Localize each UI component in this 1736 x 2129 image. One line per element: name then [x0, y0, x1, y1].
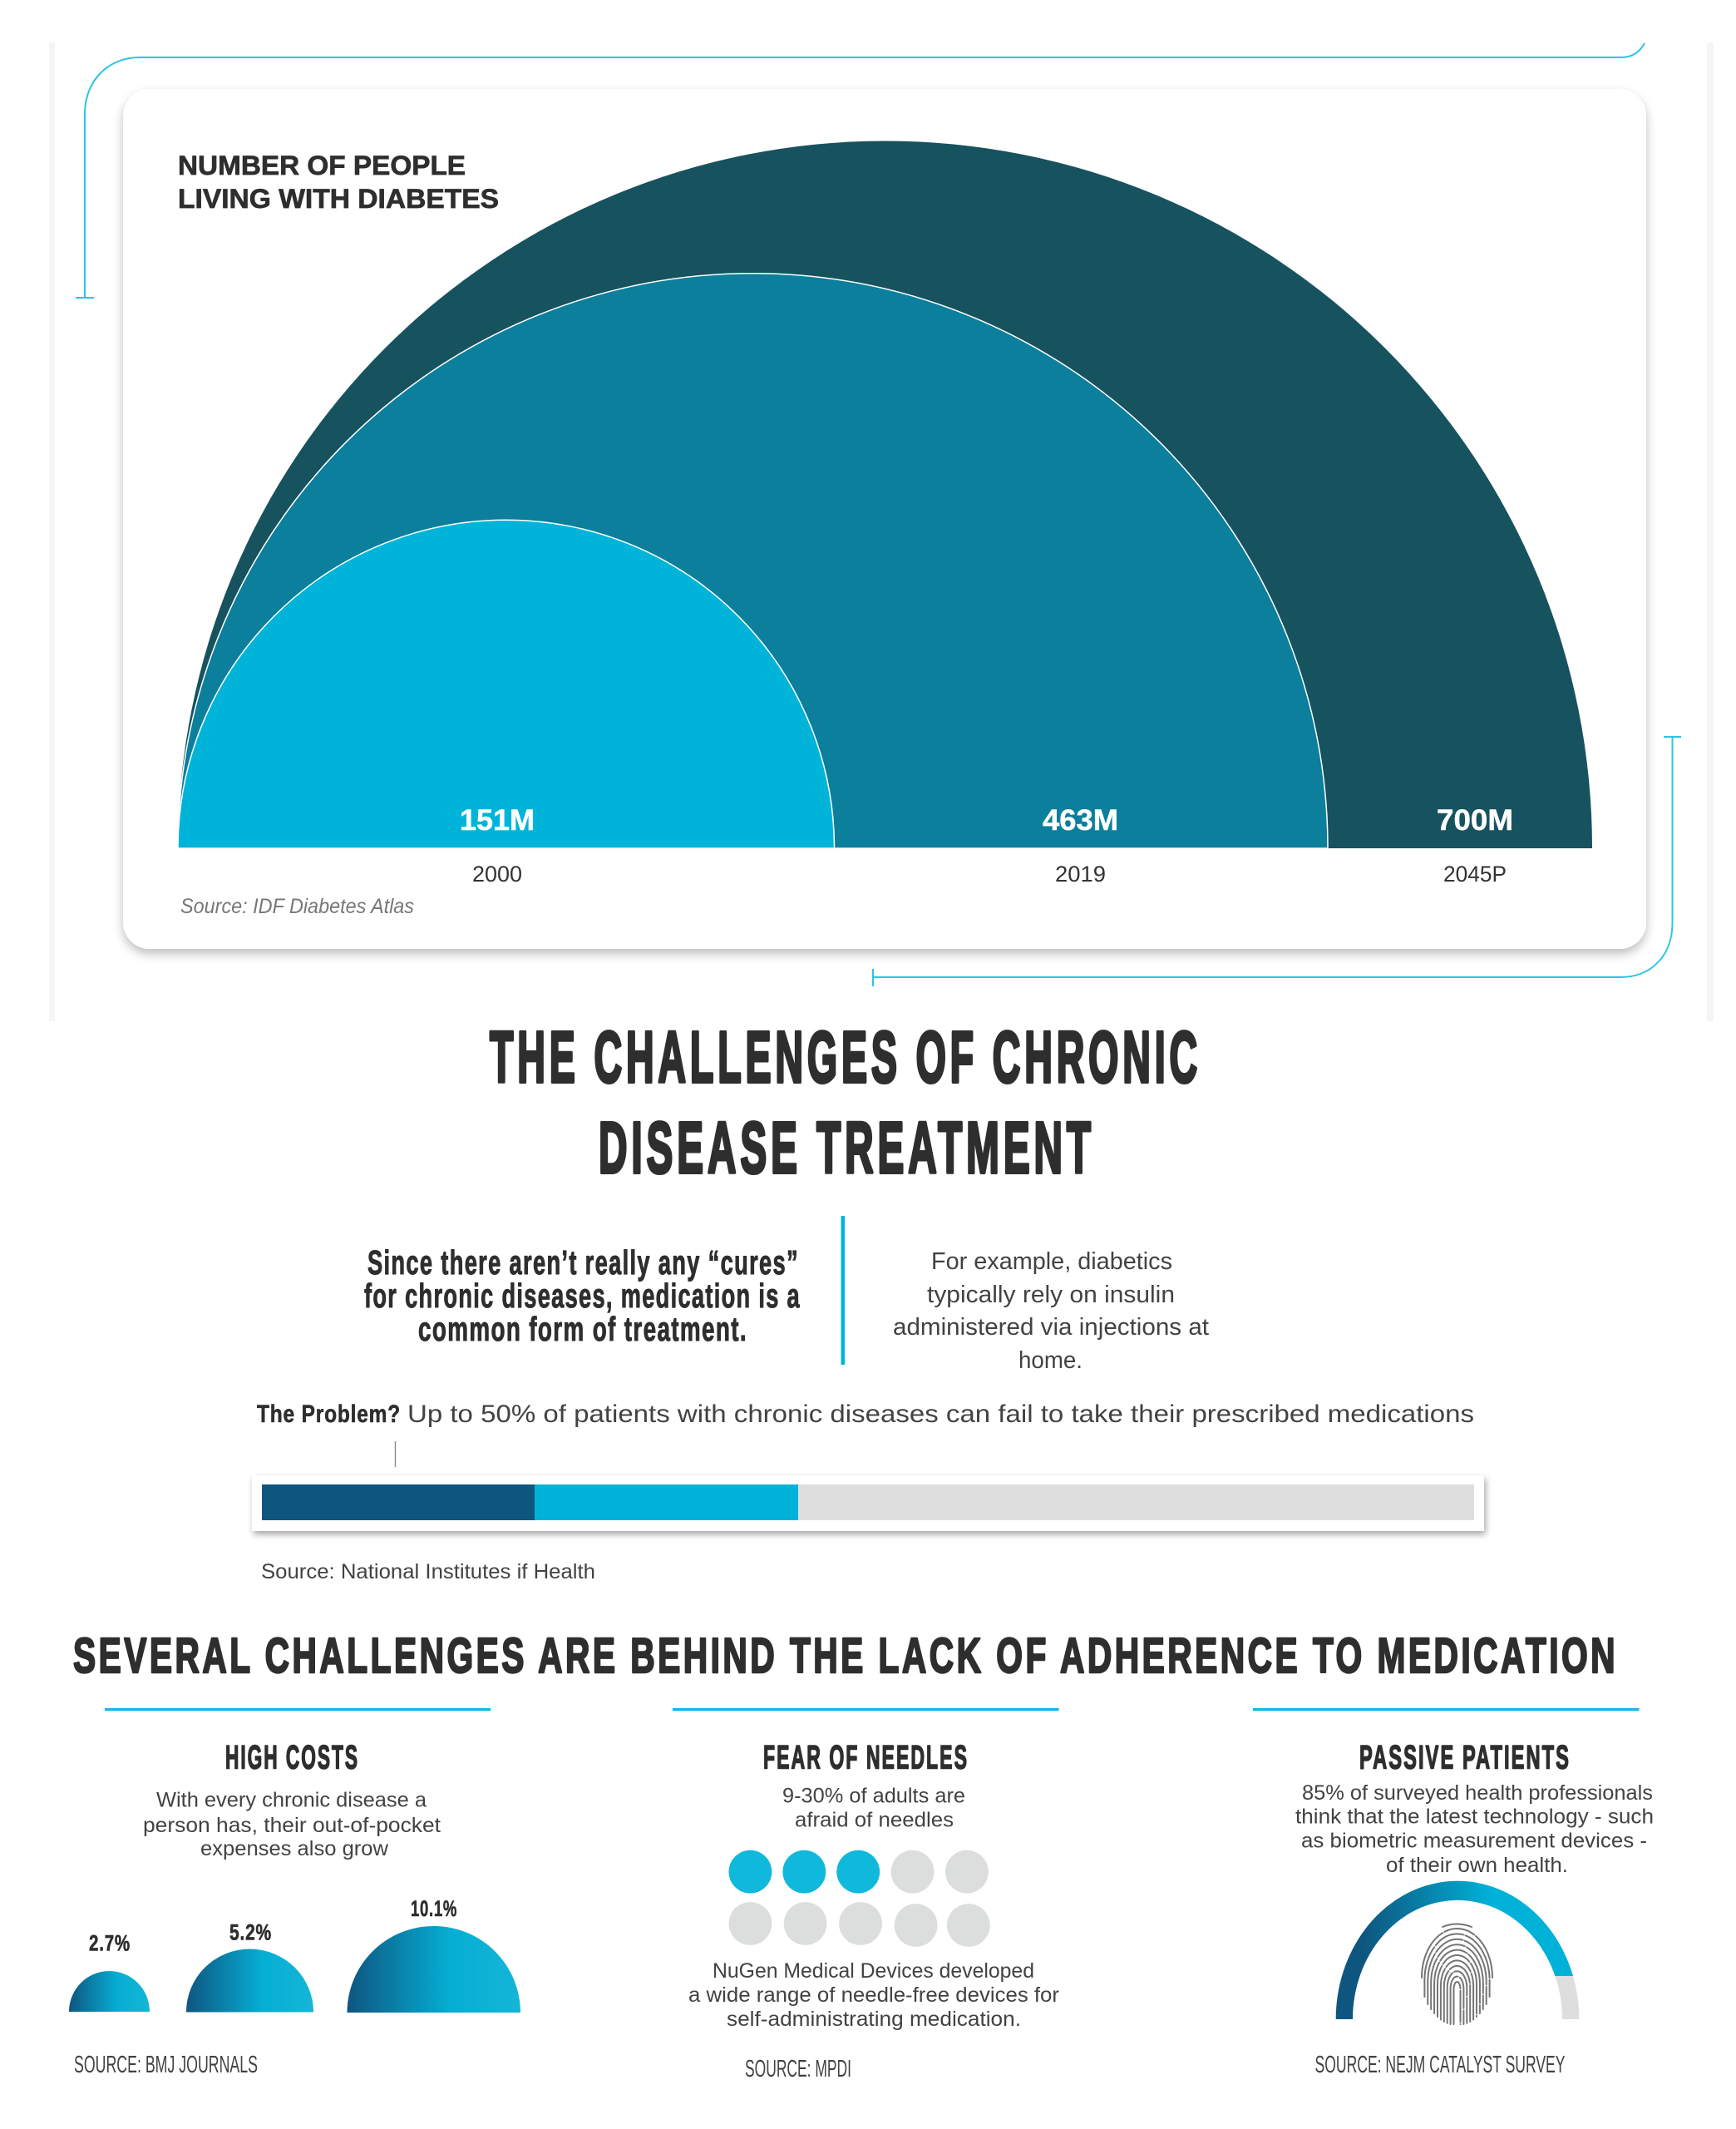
description: NuGen devices: a wide range of needle-free devices for: [688, 1983, 1059, 2007]
source: MPDI: SOURCE: MPDI: [745, 2056, 851, 2082]
text block: diabetics rely on insulin: For example, diabetics: [931, 1248, 1172, 1275]
description: [143, 1788, 441, 1860]
description: adults afraid: 9-30% of adults are: [782, 1785, 965, 1808]
year: 2019: 2019: [1055, 862, 1106, 887]
description: expenses also grow: [200, 1837, 389, 1860]
segment: dark blue: [262, 1484, 535, 1520]
description: person has, their out-of-pocket: [143, 1814, 441, 1837]
year: 2000: 2000: [472, 862, 522, 887]
value: 10.1%: 10.1%: [411, 1896, 457, 1921]
marker: tick above bar: [395, 1441, 396, 1467]
panel: high costs: [69, 1708, 520, 2078]
source: IDF Diabetes Atlas: Source: IDF Diabetes Atlas: [180, 895, 414, 918]
description: adults afraid: [782, 1785, 965, 1831]
heading: high costs: HIGH COSTS: [225, 1740, 359, 1776]
value: 463M: 463M: [1043, 804, 1118, 837]
dome: 10.1%: [348, 1926, 520, 2013]
chart: nested semicircles: [178, 141, 1592, 887]
value: 151M: 151M: [460, 804, 535, 837]
segment: grey remainder: [798, 1484, 1474, 1520]
description: With every chronic disease a: [156, 1788, 427, 1811]
description: as biometric measurement devices -: [1301, 1830, 1647, 1853]
source: BMJ Journals: SOURCE: BMJ JOURNALS: [74, 2052, 258, 2078]
chart title: [178, 151, 499, 214]
text block: medication is a common treatment: for chronic diseases, medication is a: [364, 1277, 801, 1315]
description: NuGen devices: self-administrating medication.: [727, 2008, 1021, 2031]
bar chart: 50 percent of patients: [252, 1475, 1484, 1531]
panel: passive patients: [1253, 1708, 1654, 2078]
divider: vertical cyan bar: [841, 1216, 845, 1365]
chart title: NUMBER OF PEOPLE: [178, 151, 466, 180]
text block: diabetics rely on insulin: home.: [1018, 1347, 1083, 1374]
description: NuGen devices: [688, 1959, 1059, 2031]
dome: 2.7%: [69, 1971, 150, 2012]
heading: the challenges of chronic disease treatment: DISEASE TREATMENT: [599, 1108, 1095, 1188]
text block: medication is a common treatment: common form of treatment.: [418, 1310, 747, 1348]
semicircle: 2045P 700M: [178, 141, 1592, 848]
text block: diabetics rely on insulin: administered via injections at: [893, 1314, 1209, 1341]
semicircle: 2000 151M: [178, 520, 835, 848]
gauge: 85 percent arc: [1336, 1881, 1579, 2019]
chart: dot pictogram: [728, 1850, 990, 1947]
text block: diabetics rely on insulin: [893, 1248, 1209, 1374]
icon: fingerprint: [1422, 1924, 1492, 2024]
heading: fear of needles: FEAR OF NEEDLES: [763, 1740, 969, 1776]
description: of their own health.: [1386, 1854, 1568, 1877]
description: 85% of surveyed health professionals: [1302, 1781, 1653, 1805]
semicircle: 2019 463M: [178, 274, 1328, 848]
text block: medication is a common treatment: Since there aren’t really any “cures”: [367, 1243, 799, 1282]
text block: medication is a common treatment: [364, 1243, 801, 1348]
source: National Institutes if Health: Source: National Institutes if Health: [261, 1560, 595, 1583]
segment: cyan: [535, 1484, 798, 1520]
description: [1295, 1781, 1654, 1877]
chart: growing domes: [69, 1896, 520, 2013]
heading: the challenges of chronic disease treatment: [490, 1017, 1201, 1188]
description: adults afraid: afraid of needles: [795, 1808, 954, 1831]
panel: fear of needles: [673, 1708, 1059, 2082]
panel: number of people living with diabetes: [123, 89, 1646, 949]
connector: bottom-right bracket: [873, 737, 1681, 986]
description: NuGen devices: NuGen Medical Devices developed: [713, 1959, 1034, 1983]
chart title: LIVING WITH DIABETES: [178, 184, 499, 214]
description: think that the latest technology - such: [1295, 1805, 1654, 1828]
source: NEJM Catalyst survey: SOURCE: NEJM CATALYST SURVEY: [1315, 2052, 1565, 2078]
text block: the problem: Up to 50% of patients with chronic diseases can fail to take their prescribed medications: [407, 1400, 1474, 1428]
value: 2.7%: 2.7%: [89, 1931, 131, 1956]
dome: 5.2%: [186, 1949, 313, 2013]
year: 2045P: 2045P: [1443, 862, 1507, 887]
text block: diabetics rely on insulin: typically rely on insulin: [927, 1282, 1175, 1308]
heading: passive patients: PASSIVE PATIENTS: [1359, 1740, 1571, 1776]
value: 5.2%: 5.2%: [229, 1919, 272, 1944]
connector: top-left bracket: [76, 43, 1645, 298]
value: 700M: 700M: [1437, 804, 1513, 837]
text block: the problem: The Problem?: [257, 1400, 401, 1428]
